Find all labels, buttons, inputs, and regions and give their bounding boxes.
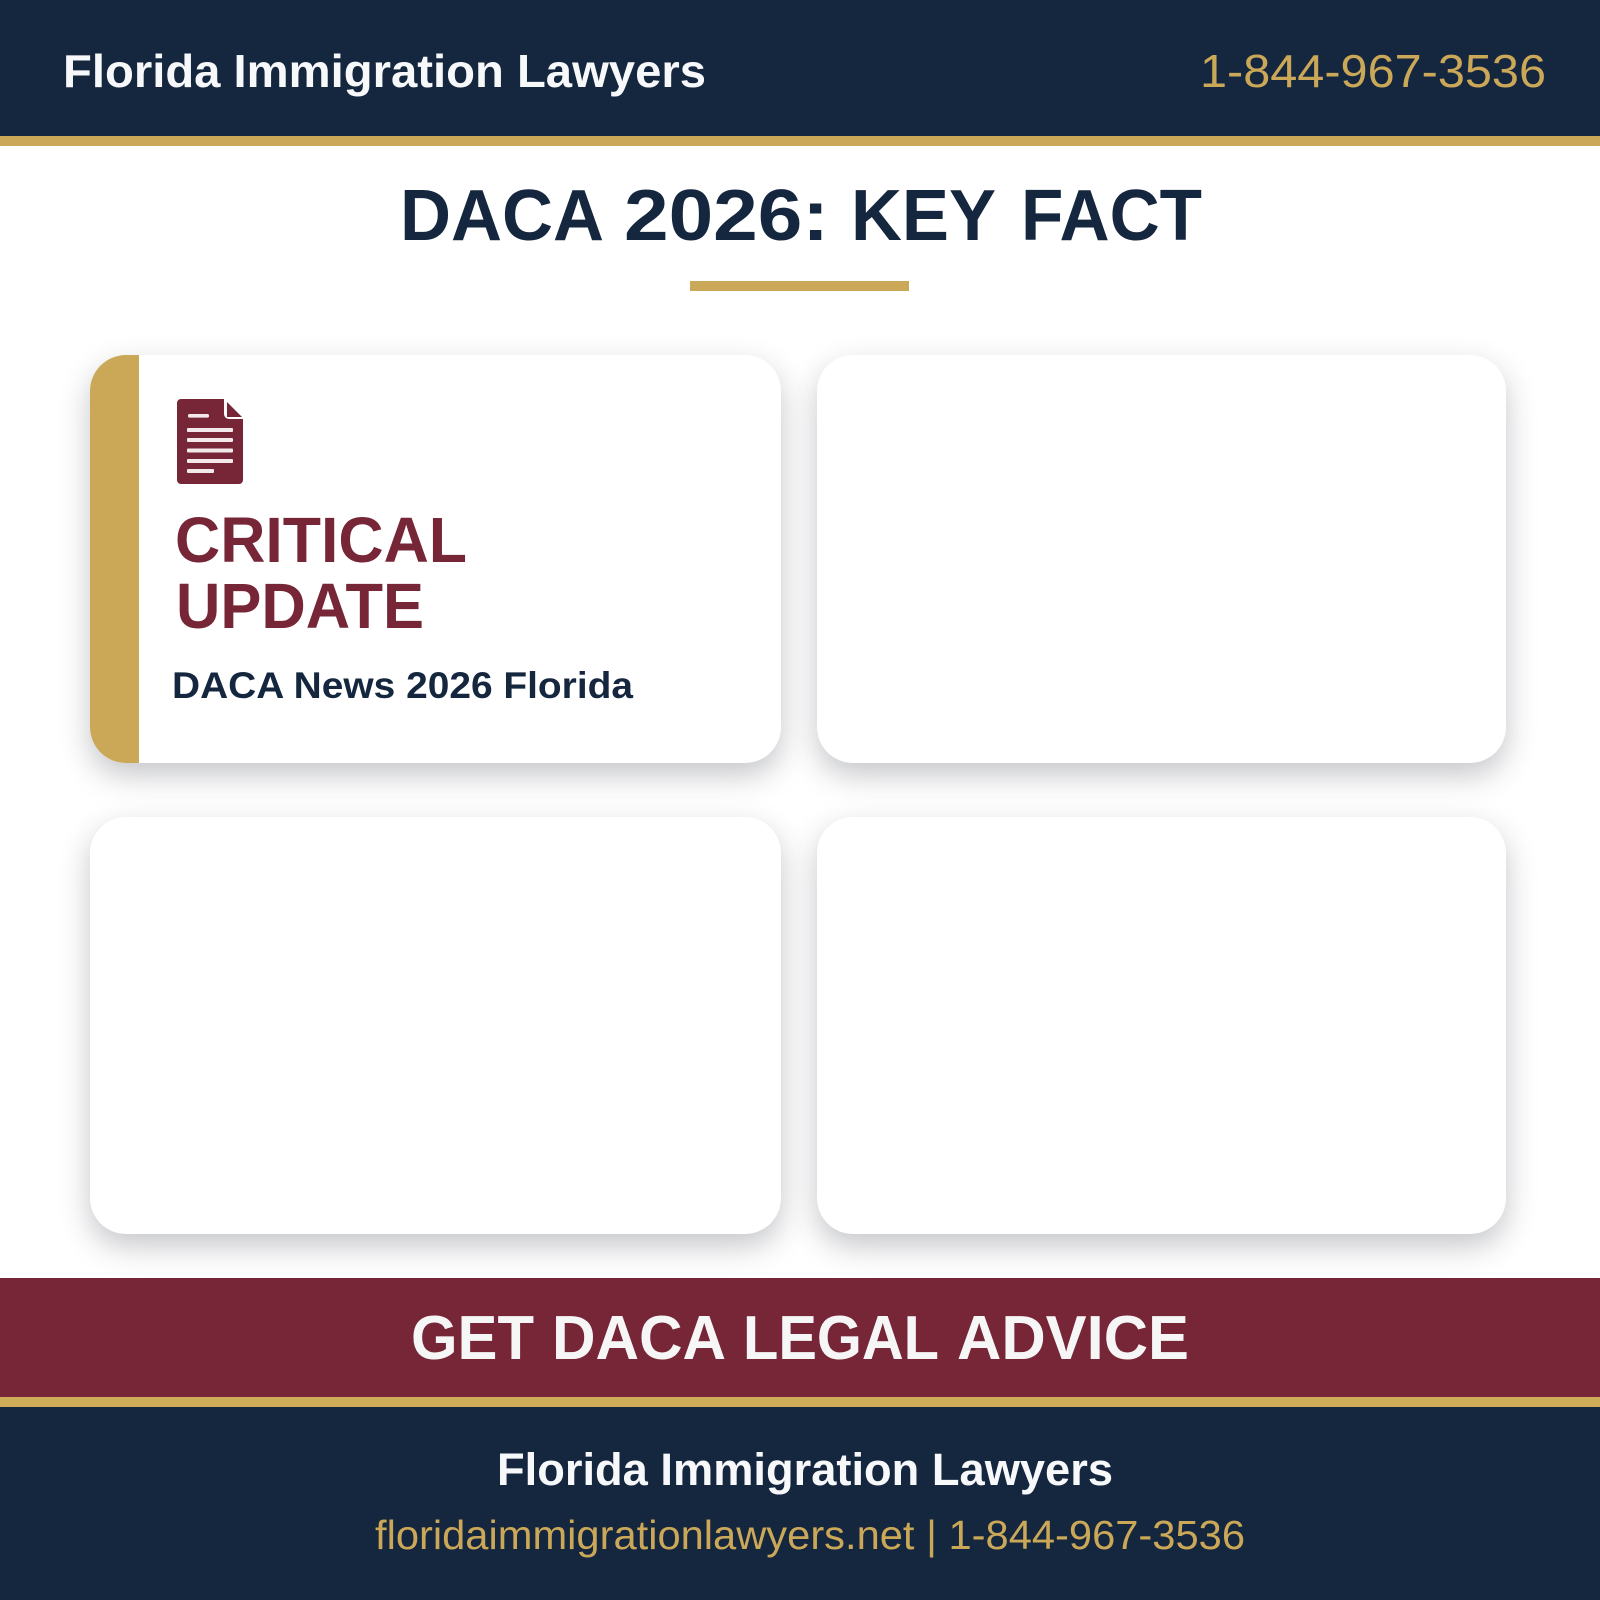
call to action text [411,1304,1189,1373]
title: FACT [1021,176,1202,256]
header firm name: Florida Immigration Lawyers [63,45,706,97]
title: 2026: [624,176,829,256]
panel: empty card bottom right [817,817,1506,1234]
title [400,176,1202,256]
title underline [690,281,909,291]
title: DACA [400,176,604,256]
panel: critical update card [90,355,781,763]
footer gold rule [0,1397,1600,1407]
header phone number: 1-844-967-3536 [1200,45,1546,97]
footer website and phone: floridaimmigrationlawyers.net | 1-844-967-3536 [375,1512,1245,1558]
footer firm name: Florida Immigration Lawyers [497,1444,1113,1495]
footer [0,1407,1600,1600]
card subheading: DACA News 2026 Florida [172,665,633,706]
call to action band [0,1278,1600,1397]
call to action text: LEGAL [743,1304,939,1373]
icon: document [177,399,243,484]
panel: empty card bottom left [90,817,781,1234]
card gold accent bar [90,355,139,763]
header gold rule [0,136,1600,146]
call to action text: DACA [552,1304,726,1373]
call to action text: GET [411,1304,534,1373]
card heading: UPDATE [176,570,424,642]
call to action text: ADVICE [957,1304,1189,1373]
card heading [175,504,467,642]
card heading: CRITICAL [175,504,467,576]
panel: empty card top right [817,355,1506,763]
title: KEY [851,176,996,256]
header bar [0,0,1600,146]
